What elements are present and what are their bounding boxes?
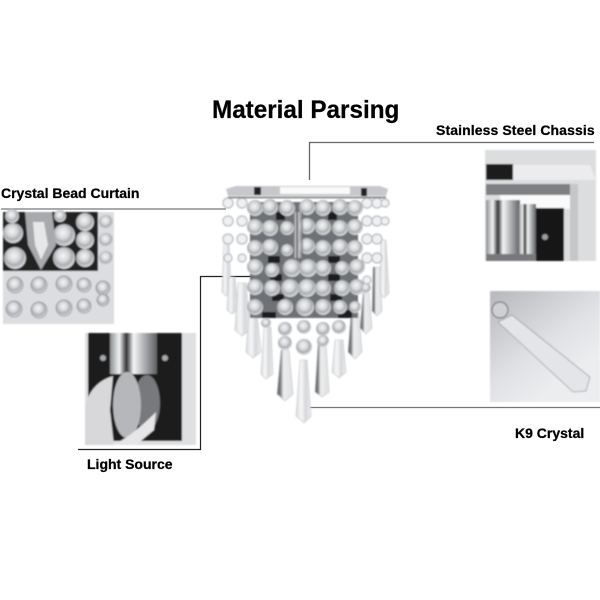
label: Stainless Steel Chassis: Stainless Steel Chassis bbox=[436, 122, 595, 138]
leader line: K9 Crystal bbox=[308, 406, 600, 408]
lower crystals bbox=[6, 276, 110, 318]
top metal plate bbox=[226, 186, 388, 198]
photo: crystal bead curtain detail bbox=[3, 209, 114, 324]
photo: light source detail bbox=[85, 333, 196, 445]
label: K9 Crystal: K9 Crystal bbox=[515, 425, 584, 441]
central bead curtain bbox=[247, 199, 365, 318]
pendant drops bbox=[222, 240, 389, 423]
side bead strands bbox=[223, 198, 389, 284]
leader line: Crystal Bead Curtain bbox=[1, 208, 226, 210]
dark gaps bbox=[262, 212, 352, 318]
leader line: Stainless Steel Chassis bbox=[310, 142, 594, 180]
inner lamp tube bbox=[294, 212, 303, 258]
label: Crystal Bead Curtain: Crystal Bead Curtain bbox=[1, 185, 139, 201]
label: Light Source: Light Source bbox=[87, 456, 173, 472]
bead chains above drops bbox=[261, 283, 371, 355]
photo: stainless steel chassis detail bbox=[485, 150, 596, 261]
sconce chandelier bbox=[222, 186, 389, 423]
upper crystals bbox=[3, 209, 113, 269]
photo: K9 crystal detail bbox=[490, 291, 600, 402]
title: Material Parsing bbox=[212, 96, 399, 124]
leader line: Light Source bbox=[78, 276, 298, 450]
